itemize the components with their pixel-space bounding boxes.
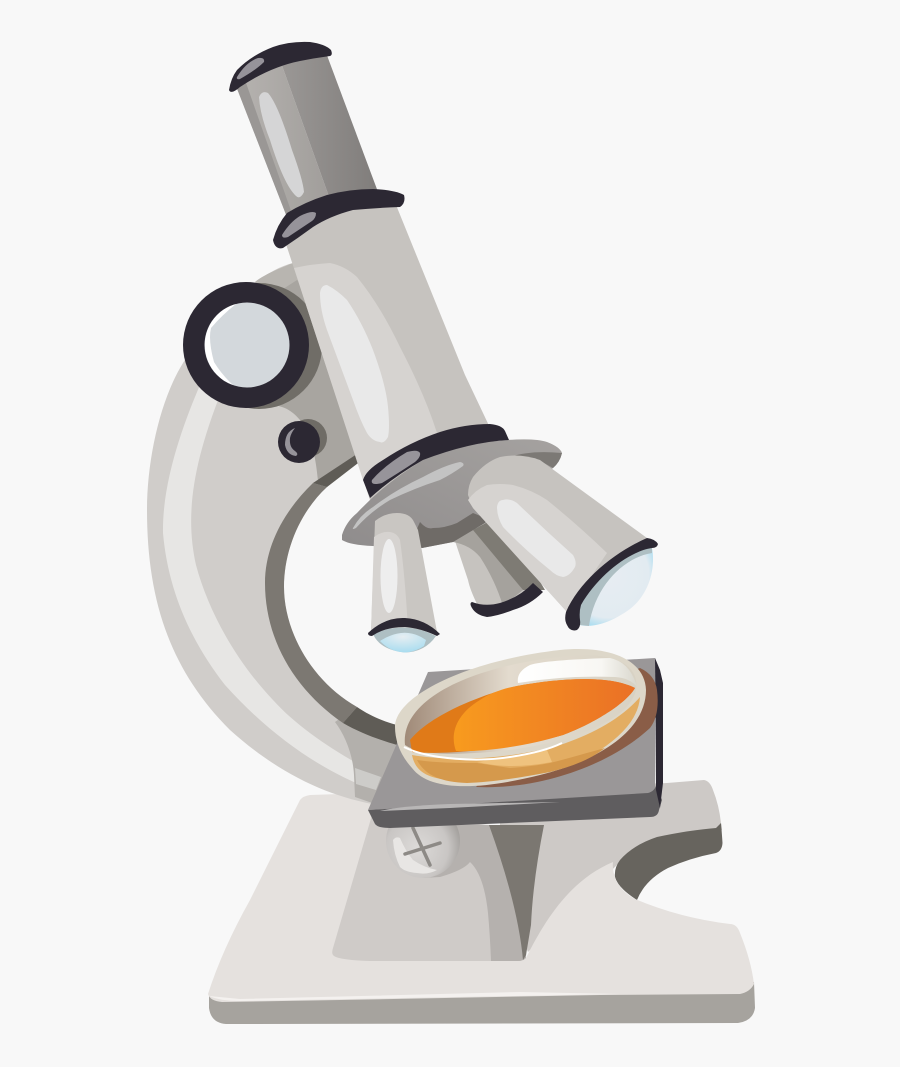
stage edge glint <box>380 802 560 811</box>
dish white reflection <box>518 658 637 687</box>
arm neck shade <box>268 280 362 481</box>
eyepiece cap <box>229 42 332 92</box>
knob lens <box>204 302 290 388</box>
cap glint <box>237 58 264 79</box>
left objective light <box>371 532 408 632</box>
arm light stripe <box>163 385 382 790</box>
dish lower wall dark <box>417 748 605 783</box>
petri dish <box>395 649 658 787</box>
right objective <box>468 456 658 630</box>
arm body <box>147 263 400 805</box>
back objective body <box>453 525 538 606</box>
arm <box>147 263 400 805</box>
stage <box>368 658 663 828</box>
stage top <box>368 658 655 810</box>
right lens <box>578 548 653 626</box>
small knob body <box>278 421 320 463</box>
main tube highlight <box>320 285 389 442</box>
knob ring <box>183 282 309 408</box>
dish white line <box>404 743 562 760</box>
dish outer rim <box>395 649 646 786</box>
middle collar <box>273 189 404 248</box>
arm inner band lower <box>343 707 397 745</box>
collar glint <box>282 212 316 238</box>
nosepiece highlight <box>353 462 464 529</box>
arm lower stripe <box>355 768 381 790</box>
stage side <box>368 785 662 828</box>
back objective <box>453 515 545 617</box>
right rim <box>565 538 658 630</box>
base top surface <box>208 792 754 1002</box>
knob glint <box>205 304 236 385</box>
base notch <box>615 823 722 900</box>
screw highlight <box>393 837 437 874</box>
large knob <box>183 282 322 409</box>
dish medium dark <box>410 679 635 753</box>
upper eyepiece tube <box>229 42 381 230</box>
right objective light <box>468 484 607 612</box>
arm inner band <box>265 483 357 723</box>
arm upper shade <box>255 263 310 300</box>
left rim <box>368 618 440 636</box>
pillar shaded side <box>423 825 530 961</box>
arm inner band upper <box>313 452 362 487</box>
tube left <box>236 60 332 230</box>
lower collar glint <box>372 451 420 484</box>
screw cross slot <box>405 828 440 865</box>
small knob <box>278 419 327 463</box>
left objective body <box>371 513 437 632</box>
tube right <box>280 50 381 205</box>
nosepiece dark right <box>510 452 562 468</box>
dish glass wall <box>405 655 636 754</box>
small knob shadow <box>289 419 327 457</box>
left objective <box>368 513 440 652</box>
arm lower shadow <box>335 715 400 805</box>
tube highlight <box>259 92 304 197</box>
pillar <box>332 815 544 961</box>
main tube <box>273 189 510 500</box>
small knob glint <box>285 428 297 456</box>
stage right edge <box>655 658 663 808</box>
tube left edge <box>236 80 296 230</box>
back objective dark shade <box>473 515 545 590</box>
screw head <box>386 804 460 878</box>
dish lower wall <box>412 697 640 780</box>
screw <box>386 804 460 878</box>
lower collar <box>363 424 509 498</box>
right lens shade <box>576 548 652 626</box>
nosepiece dark underside <box>410 513 490 548</box>
pillar front <box>332 815 524 961</box>
right objective highlight <box>497 499 576 577</box>
main tube body <box>284 195 510 500</box>
left lens shade <box>373 627 436 652</box>
left lens <box>380 633 426 652</box>
dish medium light <box>454 679 635 751</box>
pillar dark wedge <box>489 825 544 960</box>
back objective mid shade <box>453 525 523 606</box>
right objective body <box>468 456 647 612</box>
dish shadow <box>476 668 658 787</box>
left objective highlight <box>380 539 398 613</box>
nosepiece disc <box>342 439 562 549</box>
knob shadow <box>196 283 322 409</box>
dish lower light <box>477 750 552 766</box>
base front edge <box>209 982 755 1024</box>
back objective rim <box>470 583 543 617</box>
base highlight <box>209 992 620 1001</box>
main tube light area <box>294 263 437 480</box>
base <box>208 780 755 1024</box>
base rear platform <box>500 780 722 952</box>
nosepiece <box>342 424 562 549</box>
